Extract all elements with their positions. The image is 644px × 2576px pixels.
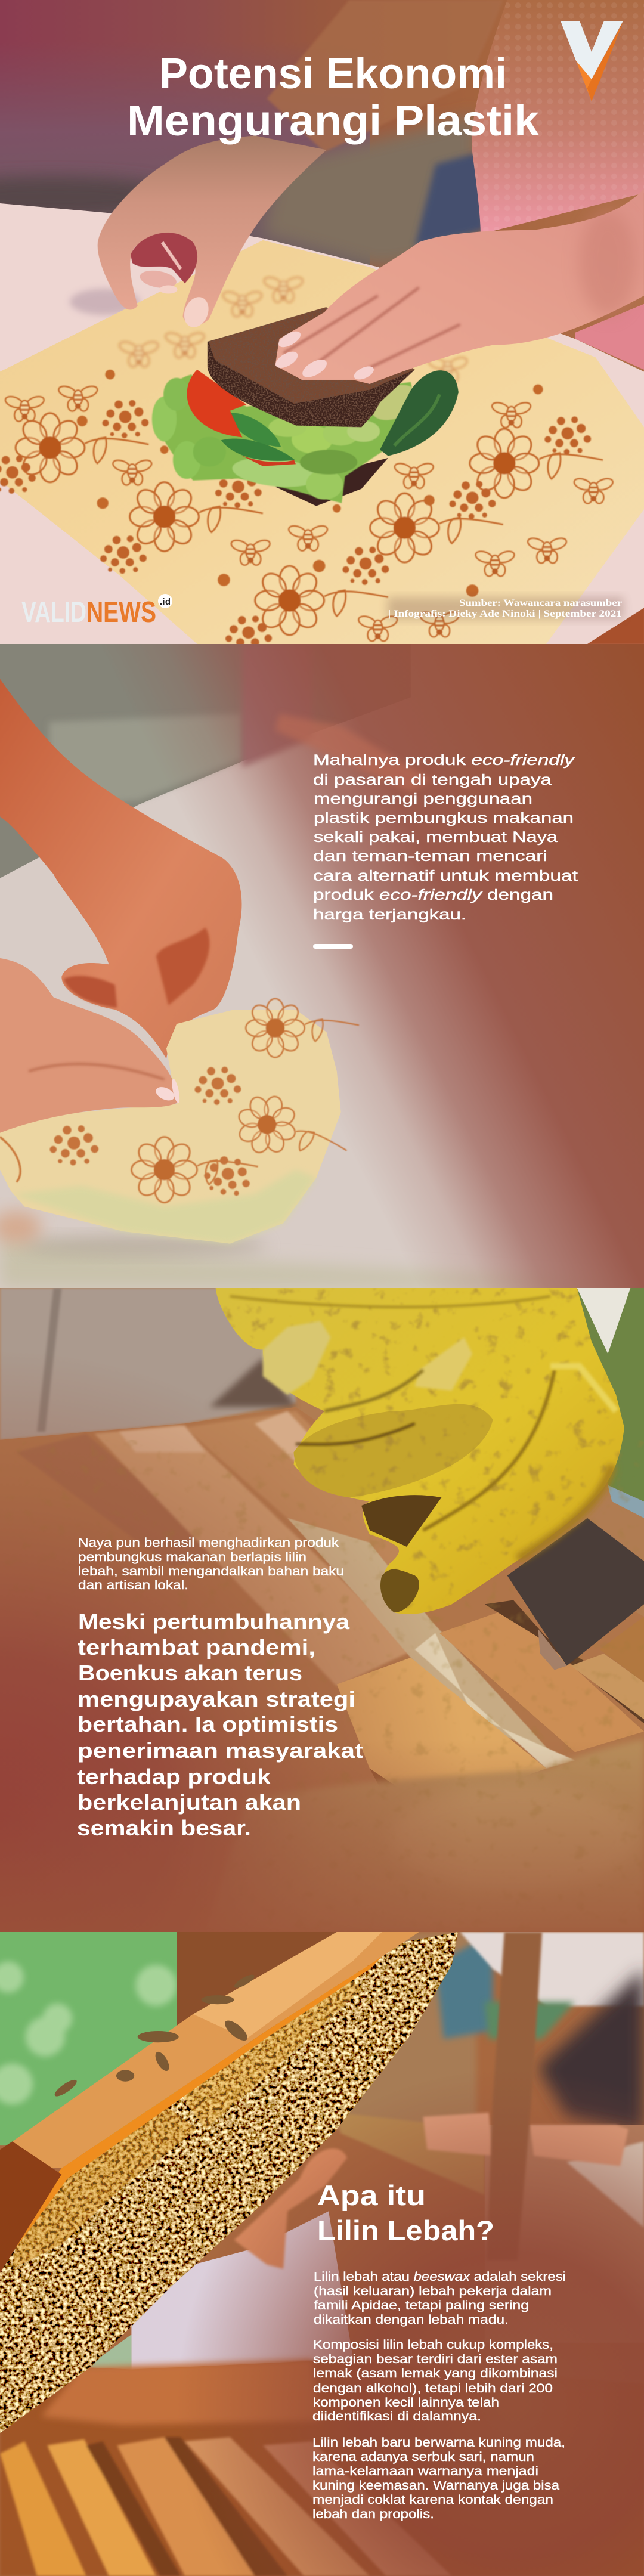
text: eco-friendly paragraph: sekali pakai, membuat Naya: [314, 829, 558, 846]
text: beeswax definition: [314, 2270, 566, 2327]
text: beeswax composition: komponen kecil lainnya telah: [313, 2395, 499, 2410]
text: highlighted statement: [77, 1609, 363, 1840]
text: highlighted statement: terhambat pandemi,: [78, 1635, 315, 1659]
text: beeswax colour: [312, 2435, 565, 2521]
wooden frame bar: [13, 1932, 419, 2168]
text: highlighted statement: Boenkus akan terus: [78, 1661, 302, 1685]
text: beeswax colour: menjadi coklat karena kontak dengan: [312, 2493, 553, 2507]
icon: V logo: [561, 21, 623, 101]
text: beeswax composition: lemak (asam lemak yang dikombinasi: [313, 2366, 558, 2380]
tabletop: [0, 203, 644, 644]
text: highlighted statement: bertahan. Ia optimistis: [78, 1712, 338, 1736]
credits: Sumber: Wawancara narasumber: [459, 598, 622, 608]
title: Potensi Ekonomi: [159, 50, 507, 98]
glove: [216, 1288, 624, 1614]
title: Mengurangi Plastik: [127, 97, 540, 145]
text: beeswax composition: dengan alkohol), tetapi lebih dari 200: [313, 2381, 553, 2395]
text: intro paragraph: [78, 1535, 344, 1592]
text: beeswax definition: famili Apidae, tetapi paling sering: [314, 2298, 529, 2312]
divider bar: [313, 944, 353, 949]
title: [127, 50, 540, 145]
beeswax wrap: [0, 240, 644, 644]
credits: | Infografis: Dieky Ade Ninoki | September 2021: [388, 609, 622, 619]
lettuce: [152, 370, 459, 503]
text: intro paragraph: pembungkus makanan berlapis lilin: [78, 1550, 306, 1564]
text: highlighted statement: berkelanjutan akan: [78, 1790, 301, 1815]
text: highlighted statement: penerimaan masyarakat: [78, 1738, 363, 1763]
text: beeswax colour: lebah dan propolis.: [312, 2507, 434, 2521]
heading: Apa itu Lilin Lebah: [317, 2179, 494, 2246]
text: intro paragraph: lebah, sambil mengandalkan bahan baku: [78, 1564, 344, 1578]
heading: Apa itu Lilin Lebah: Apa itu: [317, 2179, 426, 2211]
text: beeswax colour: karena adanya serbuk sari, namun: [312, 2450, 534, 2464]
text: highlighted statement: semakin besar.: [77, 1816, 251, 1840]
tool blade: [507, 1518, 644, 1666]
text: eco-friendly paragraph: produk eco-friendly dengan: [313, 887, 553, 903]
honeycomb frame with bees: [0, 1932, 458, 2433]
text: beeswax composition: [312, 2337, 558, 2423]
text: beeswax composition: diidentifikasi di dalamnya.: [312, 2409, 481, 2423]
text: eco-friendly paragraph: cara alternatif untuk membuat: [313, 868, 578, 884]
gradient overlay: [0, 1932, 644, 2576]
text: intro paragraph: dan artisan lokal.: [78, 1578, 188, 1592]
upper hand: [0, 679, 242, 1059]
text: beeswax composition: Komposisi lilin lebah cukup kompleks,: [313, 2337, 553, 2352]
lower hand: [0, 958, 179, 1133]
text: eco-friendly paragraph: [313, 752, 578, 923]
heading: Apa itu Lilin Lebah: Lilin Lebah?: [317, 2215, 494, 2246]
text: beeswax composition: sebagian besar terdiri dari ester asam: [313, 2352, 558, 2366]
panel: bees on honeycomb frame: [0, 1932, 644, 2576]
text: eco-friendly paragraph: dan teman-teman mencari: [313, 848, 547, 865]
text: beeswax definition: dikaitkan dengan lebah madu.: [314, 2312, 509, 2327]
panel: gloved hand on beehive: [0, 1288, 644, 1932]
right hand: [275, 189, 644, 384]
logo: VALIDNEWS.id: .id: [160, 597, 171, 607]
text: beeswax definition: (hasil keluaran) lebah pekerja dalam: [314, 2284, 552, 2298]
hive wood strips: [0, 1407, 644, 1932]
text: eco-friendly paragraph: harga terjangkau.: [313, 906, 466, 923]
lower frames: [0, 2359, 644, 2576]
text: eco-friendly paragraph: plastik pembungkus makanan: [314, 810, 574, 826]
text: beeswax definition: Lilin lebah atau beeswax adalah sekresi: [314, 2270, 566, 2284]
left hand: [98, 135, 327, 325]
text: intro paragraph: Naya pun berhasil menghadirkan produk: [78, 1535, 339, 1550]
logo: VALIDNEWS.id: NEWS: [86, 596, 156, 628]
text: beeswax colour: lama-kelamaan warnanya menjadi: [312, 2464, 538, 2478]
pale wall: [131, 2211, 353, 2370]
text: highlighted statement: Meski pertumbuhannya: [78, 1609, 350, 1634]
panel: hands wrapping food: [0, 644, 644, 1288]
logo: VALIDNEWS.id: [21, 594, 172, 628]
forearm: [267, 0, 503, 152]
text: eco-friendly paragraph: di pasaran di tengah upaya: [313, 772, 552, 788]
food bundle: [0, 1010, 341, 1244]
text: beeswax colour: kuning keemasan. Warnanya juga bisa: [312, 2478, 559, 2493]
logo: VALIDNEWS.id: VALID: [21, 596, 86, 628]
panel: sandwich photo with title: [0, 0, 644, 654]
sandwich: [275, 458, 388, 506]
background bokeh: [0, 1932, 177, 2145]
text: eco-friendly paragraph: mengurangi penggunaan: [314, 791, 532, 807]
credits: [388, 597, 623, 619]
text: highlighted statement: terhadap produk: [77, 1764, 271, 1789]
text: eco-friendly paragraph: Mahalnya produk eco-friendly: [313, 752, 575, 769]
text: beeswax colour: Lilin lebah baru berwarna kuning muda,: [312, 2435, 565, 2450]
text: highlighted statement: mengupayakan strategi: [78, 1687, 355, 1711]
